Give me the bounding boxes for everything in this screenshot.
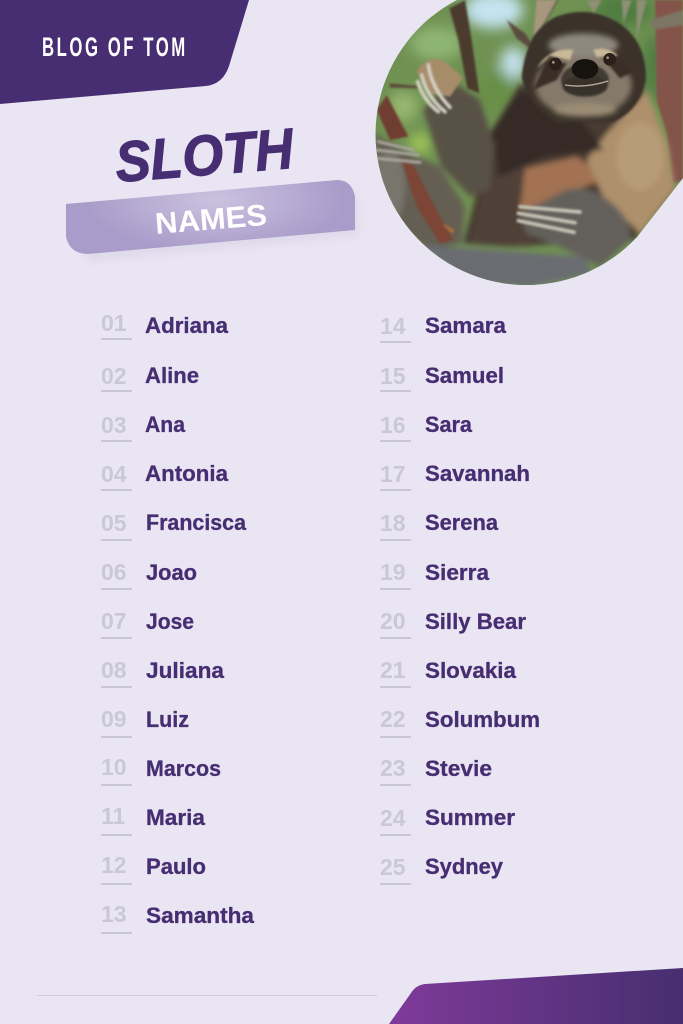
footer ribbon <box>389 968 683 1024</box>
entry 04 <box>101 461 229 490</box>
entry 11: 11 <box>101 803 126 829</box>
sloth head <box>522 12 646 123</box>
entry 03: Ana <box>145 412 186 437</box>
entry 19 <box>380 559 490 589</box>
entry 23: Stevie <box>425 756 492 781</box>
entry 23: 23 <box>380 755 406 781</box>
entry 03: 03 <box>101 412 127 438</box>
banner label: NAMES <box>154 199 268 241</box>
entry 08: Juliana <box>146 658 225 683</box>
header ribbon <box>0 0 249 104</box>
entry 09: 09 <box>101 706 127 732</box>
raised arm <box>423 80 495 197</box>
entry 10: 10 <box>101 754 127 780</box>
entry 16: 16 <box>380 412 406 438</box>
entry 03 <box>101 412 186 441</box>
entry 11: Maria <box>146 805 206 830</box>
entry 02: Aline <box>145 363 199 388</box>
entry 07: 07 <box>101 608 127 634</box>
entry 20 <box>380 608 526 638</box>
entry 04: Antonia <box>145 461 229 486</box>
entry 22: Solumbum <box>425 707 540 732</box>
entry 07: Jose <box>146 609 194 634</box>
entry 18: Serena <box>425 510 499 535</box>
right arm <box>520 188 630 267</box>
entry 15: Samuel <box>425 363 504 388</box>
entry 21: 21 <box>380 657 406 683</box>
entry 19: 19 <box>380 559 406 585</box>
entry 06: 06 <box>101 559 127 585</box>
belly <box>520 157 607 210</box>
entry 02 <box>101 363 199 391</box>
entry 25: 25 <box>380 854 406 880</box>
entry 01: 01 <box>101 310 127 336</box>
entry 24: 24 <box>380 805 406 831</box>
entry 22 <box>380 706 540 737</box>
entry 19: Sierra <box>425 560 490 585</box>
entry 20: 20 <box>380 608 406 634</box>
entry 16: Sara <box>425 412 473 437</box>
entry 09 <box>101 706 189 737</box>
entry 14: 14 <box>380 313 406 339</box>
entry 01 <box>101 310 229 339</box>
entry 05: 05 <box>101 510 127 536</box>
entry 13 <box>101 901 255 933</box>
entry 17: Savannah <box>425 461 530 486</box>
entry 06: Joao <box>146 560 197 585</box>
entry 10: Marcos <box>146 756 221 781</box>
entry 10 <box>101 754 221 785</box>
entry 14 <box>380 313 507 342</box>
left limb <box>374 133 465 250</box>
list column 1 <box>101 310 255 933</box>
footer rule <box>37 994 377 996</box>
torso <box>463 83 675 247</box>
entry 18 <box>380 510 499 540</box>
entry 05 <box>101 510 247 540</box>
entry 20: Silly Bear <box>425 609 526 634</box>
bottom arm <box>420 245 593 287</box>
entry 12: Paulo <box>146 854 206 879</box>
right shoulder fur <box>587 90 675 233</box>
brand name: BLOG OF TOM <box>42 32 185 62</box>
entry 04: 04 <box>101 461 127 487</box>
title: sloth: SLOTH <box>113 117 297 195</box>
entry 09: Luiz <box>146 707 189 732</box>
entry 08 <box>101 657 225 687</box>
entry 11 <box>101 803 206 835</box>
entry 17: 17 <box>380 461 406 487</box>
background trunks <box>449 0 479 93</box>
entry 13: Samantha <box>146 903 255 928</box>
entry 02: 02 <box>101 363 127 389</box>
entry 12: 12 <box>101 852 127 878</box>
entry 05: Francisca <box>146 510 247 535</box>
entry 15: 15 <box>380 363 406 389</box>
entry 24 <box>380 805 515 835</box>
entry 07 <box>101 608 194 638</box>
entry 15 <box>380 363 504 391</box>
entry 24: Summer <box>425 805 515 830</box>
banner: names <box>66 180 359 262</box>
entry 25 <box>380 854 504 884</box>
entry 17 <box>380 461 530 490</box>
entry 01: Adriana <box>145 313 229 338</box>
entry 08: 08 <box>101 657 127 683</box>
entry 13: 13 <box>101 901 127 927</box>
entry 21: Slovakia <box>425 658 517 683</box>
entry 21 <box>380 657 517 687</box>
list column 2 <box>380 313 540 884</box>
entry 06 <box>101 559 197 589</box>
entry 22: 22 <box>380 706 406 732</box>
entry 14: Samara <box>425 313 507 338</box>
entry 16 <box>380 412 473 441</box>
entry 23 <box>380 755 492 785</box>
entry 25: Sydney <box>425 854 504 879</box>
photo: sloth on branch <box>370 0 683 295</box>
entry 18: 18 <box>380 510 406 536</box>
sloth claws <box>376 65 580 232</box>
entry 12 <box>101 852 206 884</box>
